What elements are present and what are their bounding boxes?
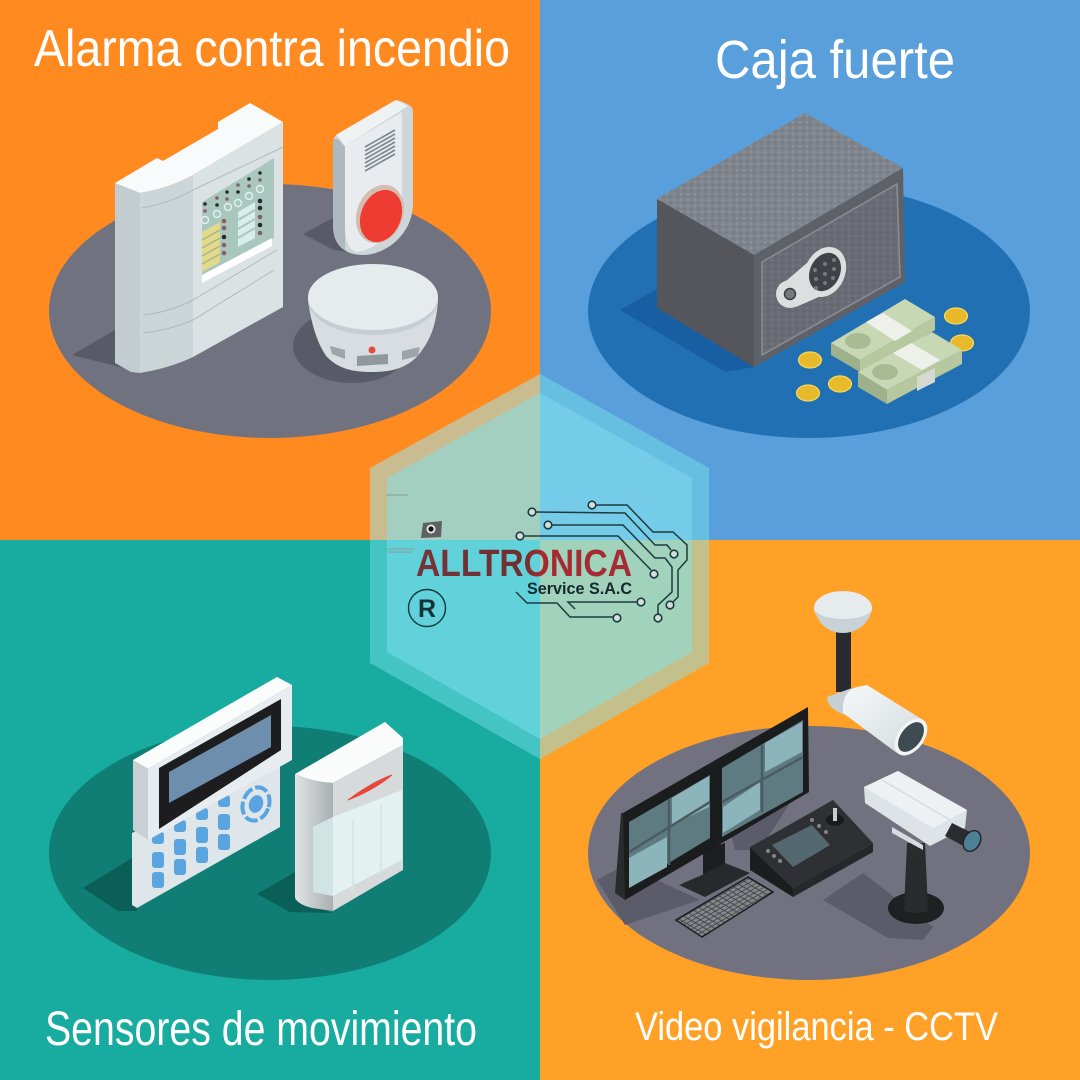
icon: control panel: [115, 103, 283, 373]
panel: fire alarm: [49, 100, 491, 438]
background: teal quadrant: [0, 540, 540, 1080]
background: blue quadrant: [540, 0, 1080, 540]
icon: siren: [333, 100, 413, 255]
platform disc: [49, 726, 491, 980]
background: orange quadrant: [0, 0, 540, 540]
heading: motion sensors: Sensores de movimiento: [45, 1003, 477, 1056]
panel: cctv: [588, 591, 1030, 980]
icon: control console: [750, 800, 873, 897]
icon: money stacks: [831, 299, 962, 404]
background: amber quadrant: [540, 540, 1080, 1080]
icon: logo camera: [386, 495, 442, 552]
icon: smoke detector: [308, 264, 438, 372]
icon: standing camera: [864, 771, 984, 924]
device shadows: [72, 218, 411, 383]
platform disc: [588, 184, 1030, 438]
logo: [386, 495, 687, 626]
heading: cctv: Video vigilancia - CCTV: [635, 1005, 998, 1049]
logo subtitle: Service S.A.C: [527, 579, 632, 598]
registered mark: R: [418, 595, 436, 623]
icon: motion sensor: [295, 722, 403, 911]
panel: motion sensors: [49, 677, 491, 980]
heading: safe: Caja fuerte: [715, 30, 955, 90]
icon: monitors: [615, 707, 809, 900]
circuit traces: [516, 501, 687, 622]
icon: keypad: [132, 677, 292, 908]
heading: fire alarm: Alarma contra incendio: [34, 20, 510, 78]
panel: safe: [588, 113, 1030, 438]
shadows: [597, 795, 933, 940]
icon: ceiling camera: [814, 591, 934, 762]
icon: safe box: [657, 113, 905, 367]
icon: keyboard: [676, 877, 773, 937]
registered mark: [408, 590, 446, 626]
central hexagon: [370, 374, 709, 759]
device shadows: [83, 858, 333, 913]
platform disc: [49, 184, 491, 438]
platform disc: [588, 726, 1030, 980]
logo name: ALLTRONICA: [416, 543, 632, 585]
safe shadow: [620, 289, 754, 372]
icon: coins: [796, 308, 974, 401]
